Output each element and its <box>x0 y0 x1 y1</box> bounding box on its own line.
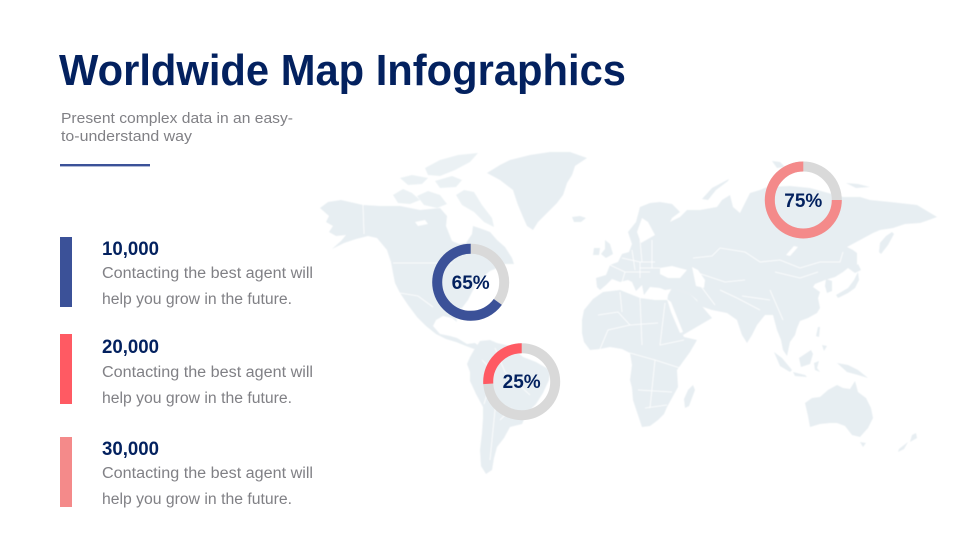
New Guinea <box>837 363 868 378</box>
North and Central America <box>320 200 514 349</box>
Sumatra <box>774 352 792 372</box>
donut chart: 25% <box>488 348 555 415</box>
legend description 2: Contacting the best agent will <box>102 364 313 381</box>
legend bar: red <box>60 334 72 404</box>
world map <box>320 152 937 474</box>
New Zealand <box>910 433 917 442</box>
Africa <box>582 290 697 427</box>
legend description 3 <box>102 465 313 508</box>
Korea <box>825 279 832 293</box>
Sulawesi <box>814 361 820 372</box>
Philippines <box>816 327 820 337</box>
legend bar: blue <box>60 237 72 307</box>
legend description 2: help you grow in the future. <box>102 390 292 407</box>
legend item 3 <box>60 437 313 508</box>
country border lines <box>363 205 843 460</box>
subtitle text block: Present complex data in an easy- <box>61 110 293 127</box>
legend item 1 <box>60 237 313 308</box>
title: Worldwide Map Infographics <box>59 46 626 95</box>
Sakhalin <box>879 232 894 254</box>
heading underline <box>60 164 150 166</box>
Iceland <box>572 216 586 222</box>
legend item 2 <box>60 334 313 407</box>
donut chart: 75%: 75% <box>784 191 822 212</box>
legend bar: pink <box>60 437 72 507</box>
legend value 20,000: 20,000 <box>102 337 159 358</box>
legend description 1: Contacting the best agent will <box>102 265 313 282</box>
Great Britain and Ireland <box>601 240 613 258</box>
Japan <box>836 272 859 298</box>
donut chart: 75% <box>770 166 837 234</box>
legend value 30,000: 30,000 <box>102 439 159 460</box>
legend description 3: Contacting the best agent will <box>102 465 313 482</box>
Arabia and Levant <box>667 288 712 335</box>
Madagascar <box>684 385 695 408</box>
South America <box>467 340 550 474</box>
Java <box>793 372 807 377</box>
Australia <box>805 381 873 437</box>
Greenland <box>487 152 587 230</box>
Tasmania <box>860 442 866 447</box>
Canadian Arctic islands <box>393 153 494 227</box>
inland seas <box>415 218 798 333</box>
Borneo <box>799 350 813 367</box>
legend description 1 <box>102 265 313 308</box>
subtitle text block <box>61 110 293 145</box>
legend description 2 <box>102 364 313 407</box>
subtitle text block: to-understand way <box>61 128 193 145</box>
donut chart: 65% <box>437 249 504 316</box>
Arctic Russian islands <box>702 179 729 200</box>
donut chart: 65%: 65% <box>452 273 490 294</box>
legend description 3: help you grow in the future. <box>102 491 292 508</box>
donut chart: 25%: 25% <box>503 372 541 393</box>
legend value 10,000: 10,000 <box>102 239 159 260</box>
Eurasia <box>596 186 937 356</box>
legend description 1: help you grow in the future. <box>102 291 292 308</box>
